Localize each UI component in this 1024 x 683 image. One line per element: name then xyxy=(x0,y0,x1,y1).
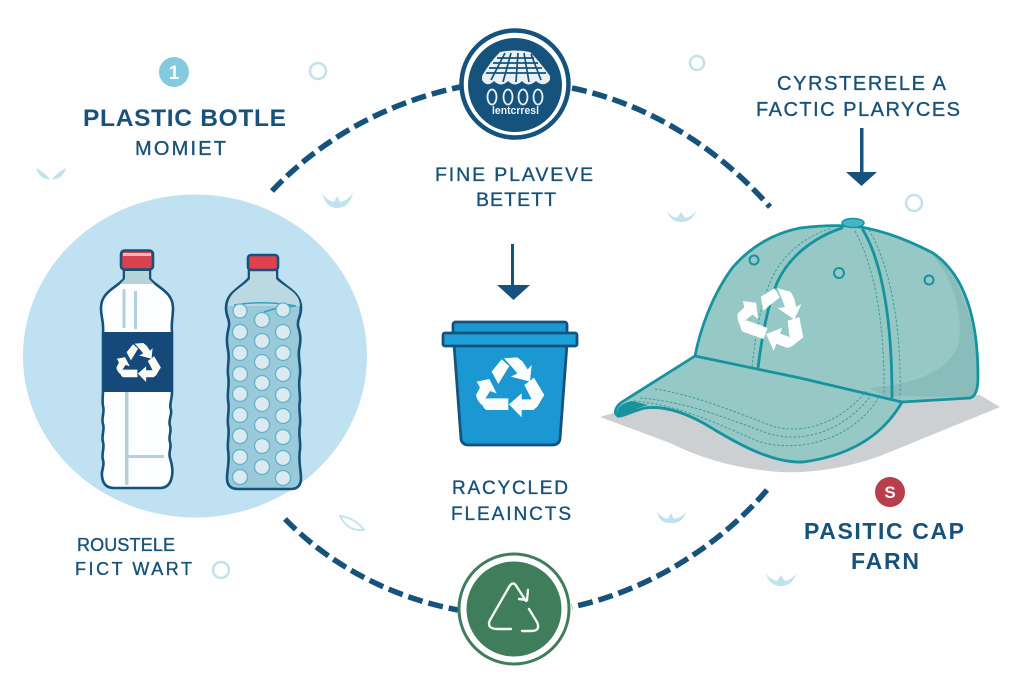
arrow: down to cap xyxy=(846,128,877,186)
dashed cycle ring xyxy=(272,87,770,610)
bottle label xyxy=(103,332,173,392)
text: bottom left label: FICT WART xyxy=(75,559,192,579)
panel: light blue circle xyxy=(23,194,367,518)
icon: bottom green circle xyxy=(459,554,569,664)
heading: plastic bottle: MOMIET xyxy=(135,138,226,160)
icon: recycle on bin xyxy=(476,357,544,417)
text: recycled label: RACYCLED xyxy=(452,478,568,499)
heading: plastic bottle: PLASTIC BOTLE xyxy=(83,105,286,132)
heading: plastic cap: FARN xyxy=(851,548,919,574)
text: top right label xyxy=(756,73,960,121)
badge: s xyxy=(875,477,905,507)
icon: recycle on bottle label xyxy=(116,343,161,382)
text: centre top label: BETETT xyxy=(476,189,556,211)
icon: top circle: lentcrresl xyxy=(492,105,539,117)
cap crown xyxy=(695,226,978,402)
icon: plastic bottle with label xyxy=(101,250,173,488)
cap stitching xyxy=(634,228,900,446)
cap brim xyxy=(615,356,902,462)
text: bottom left label xyxy=(75,535,192,579)
text: top right label: CYRSTERELE A xyxy=(777,73,947,95)
cap eyelets xyxy=(750,256,934,284)
text: centre top label xyxy=(435,164,593,211)
badge: number 1: 1 xyxy=(169,63,180,84)
heading: plastic bottle xyxy=(83,105,286,160)
text: centre top label: FINE PLAVEVE xyxy=(435,164,593,186)
decorative rings and sprouts xyxy=(36,56,922,586)
cap outlines xyxy=(615,226,978,462)
icon: recycle on cap xyxy=(730,277,816,359)
heading: plastic cap xyxy=(804,518,964,574)
badge: number 1 xyxy=(159,57,189,87)
arrow: down to bin xyxy=(497,244,530,300)
icon: recycling bin xyxy=(443,322,577,445)
visor tip xyxy=(617,401,648,415)
text: recycled label xyxy=(451,478,571,525)
text: bottom left label: ROUSTELE xyxy=(77,535,175,555)
icon: top circle xyxy=(462,30,568,138)
badge: s: S xyxy=(884,483,896,502)
icon: baseball cap xyxy=(600,218,1000,472)
heading: plastic cap: PASITIC CAP xyxy=(804,518,964,544)
icon: bottle with bubbles xyxy=(226,255,301,489)
text: recycled label: FLEAINCTS xyxy=(451,504,571,525)
bubbles xyxy=(232,303,290,486)
text: top right label: FACTIC PLARYCES xyxy=(756,99,960,121)
cap top button xyxy=(842,218,864,228)
cap shadow xyxy=(600,395,1000,472)
